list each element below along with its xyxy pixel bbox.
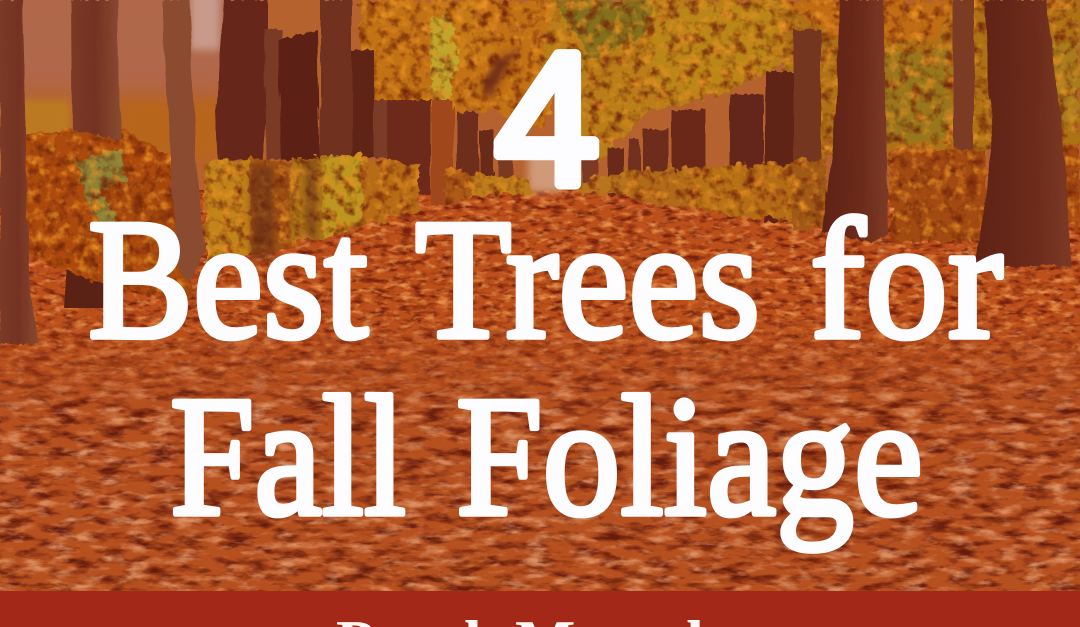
- title: line 2: [170, 362, 923, 552]
- author banner: [0, 591, 1080, 627]
- foreground tree trunks: [0, 0, 1072, 344]
- right hedges: [578, 145, 1080, 242]
- dark shadow in canopy: [482, 45, 520, 100]
- title: line 1: Best: [88, 185, 368, 375]
- rear tree trunks: [385, 0, 974, 222]
- trunk shadows in left hedge: [250, 160, 316, 260]
- title: line 1: [88, 185, 1003, 375]
- title: number 4: 4: [495, 14, 599, 224]
- vanishing point light: [528, 150, 562, 192]
- dark trunk behind left hedge: [64, 250, 108, 308]
- background haze behind trees: [0, 0, 1080, 220]
- left rear trunks: [216, 0, 386, 160]
- title: line 1: Trees: [415, 185, 760, 375]
- title: line 1: for: [810, 185, 1003, 375]
- title: line 2: Foliage: [456, 362, 923, 552]
- ground covered with fallen leaves: [0, 190, 1080, 591]
- title: line 2: Fall: [170, 362, 406, 552]
- golden canopy: [360, 0, 1080, 170]
- left hedges: [22, 125, 530, 300]
